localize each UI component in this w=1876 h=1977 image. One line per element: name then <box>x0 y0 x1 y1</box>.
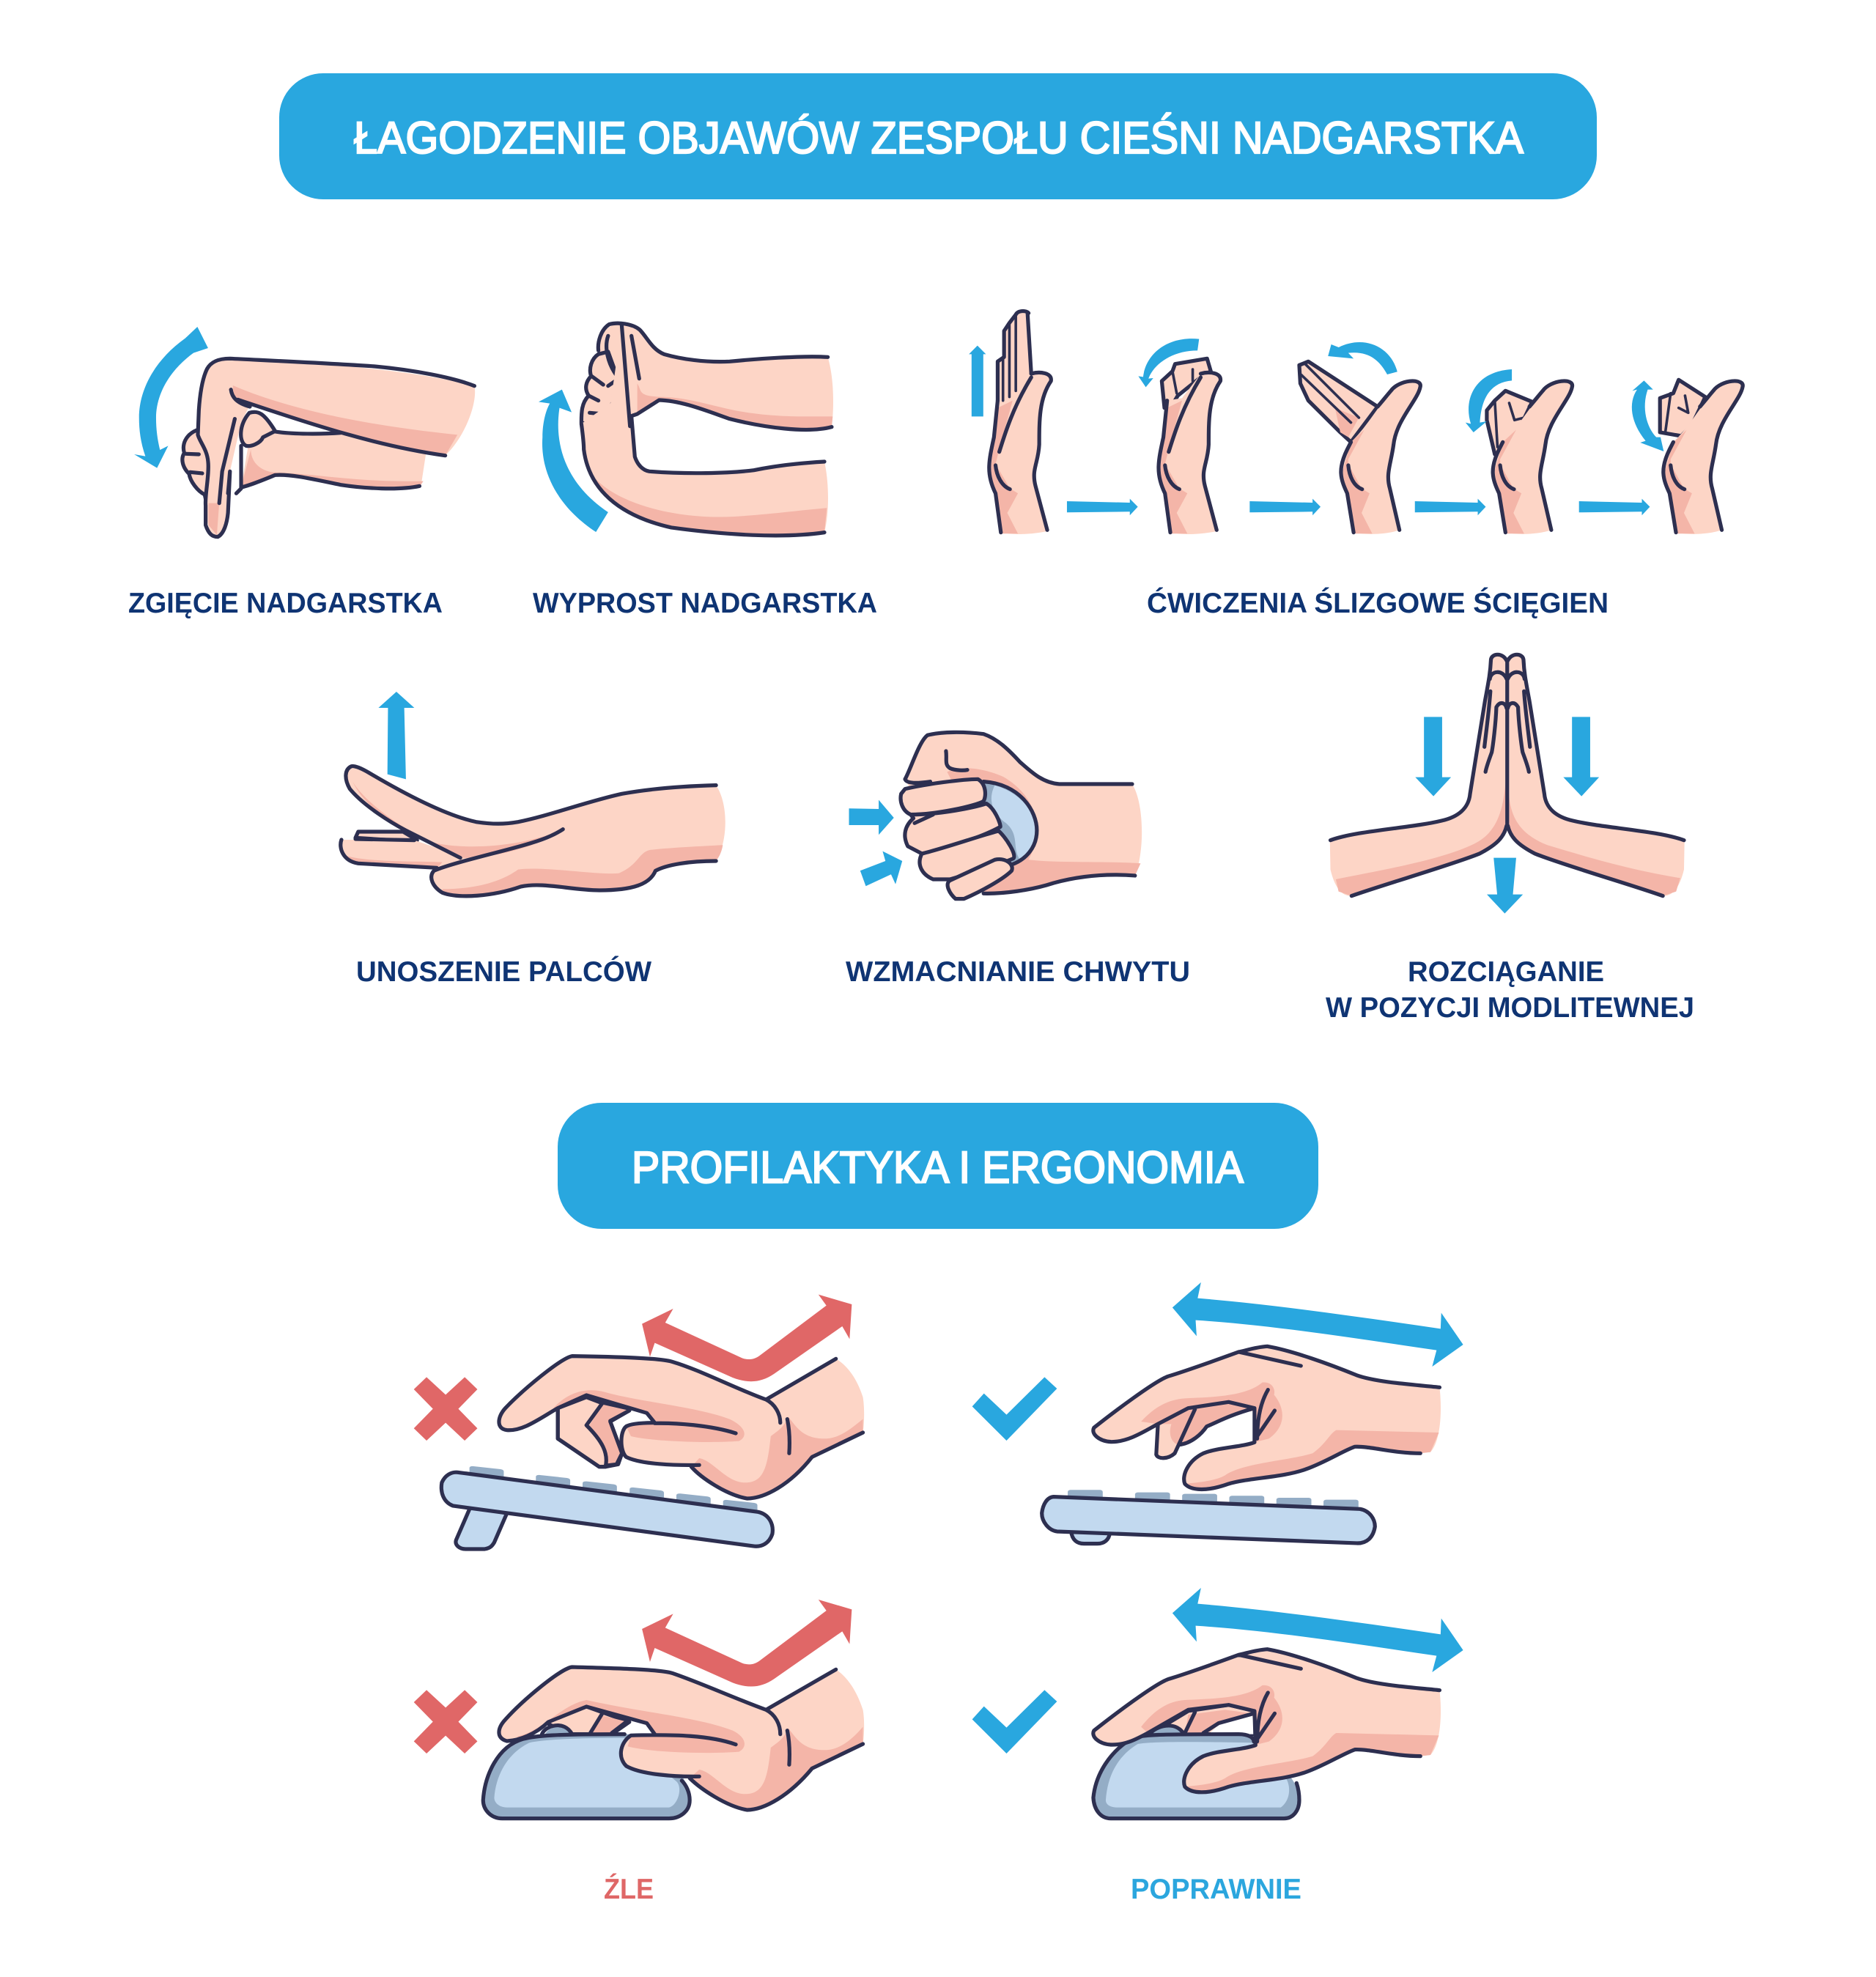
upper forearm and flexed hand <box>198 358 475 537</box>
illustration: correct mouse posture <box>972 1588 1463 1819</box>
arrows: press down <box>1415 717 1599 914</box>
hand and forearm <box>499 1667 864 1810</box>
label: grip strengthening: WZMACNIANIE CHWYTU <box>846 956 1190 988</box>
label: prayer stretch <box>1326 956 1694 1024</box>
arrow: step 4 <box>1579 499 1650 515</box>
arrow: up <box>378 692 414 779</box>
label: wrong: ŹLE <box>604 1873 654 1905</box>
correct mark <box>972 1690 1057 1754</box>
arrow: curved full fist <box>1632 380 1663 451</box>
thumb of lower hand <box>236 412 275 493</box>
illustration: wrong mouse posture <box>414 1600 864 1819</box>
arrow: curved straight fist <box>1466 369 1512 432</box>
label: correct: POPRAWNIE <box>1131 1874 1301 1905</box>
hand: hook fist <box>1159 358 1221 534</box>
wrong mark <box>414 1690 477 1754</box>
arrow: curved tabletop <box>1328 342 1397 374</box>
section banner: PROFILAKTYKA I ERGONOMIA <box>632 1142 1244 1192</box>
mouse <box>483 1726 690 1819</box>
fingers behind mouse <box>1155 1705 1255 1734</box>
palm and wrist <box>905 732 1142 893</box>
illustration: correct keyboard posture <box>972 1282 1463 1544</box>
label: prayer stretch: W POZYCJI MODLITEWNEJ <box>1326 992 1694 1024</box>
hand: tabletop <box>1299 361 1420 534</box>
arrows: squeeze <box>849 800 902 886</box>
hand: full fist <box>1660 380 1743 534</box>
hand with raised finger <box>346 766 725 896</box>
label: wrist extension: WYPROST NADGARSTKA <box>533 588 877 619</box>
arrow: up <box>969 346 986 416</box>
label: tendon glides: ĆWICZENIA ŚLIZGOWE ŚCIĘGIEN <box>1147 587 1609 619</box>
arrow: step 2 <box>1249 499 1321 515</box>
right arm and hand <box>1507 654 1685 896</box>
correct mark <box>972 1377 1057 1441</box>
illustration: finger lift <box>341 692 725 896</box>
hand and forearm <box>1093 1346 1441 1489</box>
arrow: step 1 <box>1067 499 1138 515</box>
arrow: curved up <box>539 390 608 532</box>
illustration: wrist extension <box>539 322 833 536</box>
illustration: grip strengthening <box>849 732 1142 899</box>
arrow: curved hook <box>1138 339 1199 387</box>
illustration: prayer stretch <box>1330 654 1685 914</box>
arrow: straight wrist <box>1172 1588 1463 1672</box>
illustration: wrong keyboard posture <box>414 1295 864 1549</box>
back fingers <box>182 430 224 506</box>
wrong mark <box>414 1377 477 1441</box>
hand: straight fist <box>1487 381 1573 534</box>
label: wrist flexion: ZGIĘCIE NADGARSTKA <box>128 588 443 619</box>
section banner <box>558 1103 1318 1229</box>
illustration: wrist flexion <box>134 327 475 537</box>
illustration: tendon glide sequence <box>969 311 1743 534</box>
hand and forearm <box>499 1356 864 1499</box>
label: prayer stretch: ROZCIĄGANIE <box>1408 956 1604 988</box>
keyboard <box>441 1466 772 1549</box>
lower forearm <box>241 431 426 489</box>
left arm and hand <box>1330 654 1507 896</box>
label: finger lift: UNOSZENIE PALCÓW <box>356 956 651 988</box>
middle fingers <box>558 1397 629 1467</box>
mouse <box>1093 1725 1299 1819</box>
title banner <box>279 73 1597 199</box>
fingers behind mouse <box>545 1707 654 1734</box>
lower forearm and extended hand <box>581 325 828 536</box>
hand and forearm <box>1093 1649 1441 1792</box>
arrow: straight wrist <box>1172 1282 1463 1367</box>
keyboard <box>1042 1490 1375 1544</box>
arrow: bent wrist <box>642 1295 852 1381</box>
stress ball <box>983 782 1037 865</box>
title banner: ŁAGODZENIE OBJAWÓW ZESPOŁU CIEŚNI NADGARSTKA <box>354 113 1524 163</box>
back fingers <box>341 832 465 868</box>
arrow: step 3 <box>1415 499 1485 515</box>
arrow: curved down <box>134 327 208 468</box>
hand: straight fingers <box>989 311 1051 534</box>
arrow: bent wrist <box>642 1600 852 1687</box>
upper forearm <box>598 322 833 429</box>
back fingers <box>581 336 618 425</box>
fingers <box>901 779 1014 899</box>
